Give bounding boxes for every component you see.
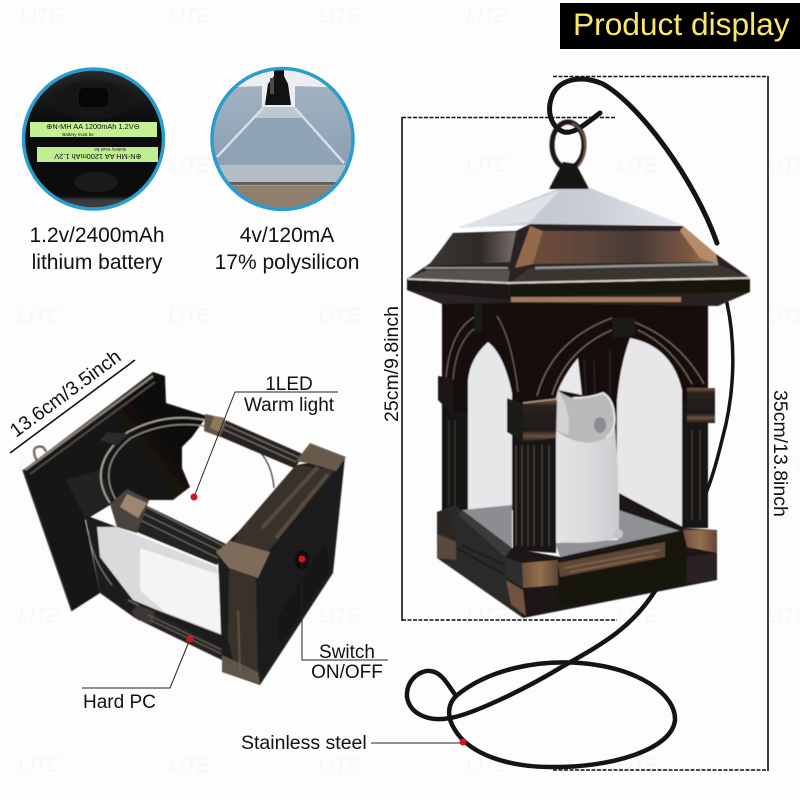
callout: stainless steel [241, 732, 466, 754]
base silhouette [437, 508, 717, 618]
callout: switch: Switch [319, 642, 375, 663]
heading badge: Product display: Product display [573, 6, 790, 42]
panel: battery detail [20, 66, 170, 274]
caption: solar specs: 4v/120mA [240, 224, 334, 247]
wire stand behind lantern [468, 79, 733, 502]
callout: switch: ON/OFF [311, 662, 383, 683]
lower window [85, 515, 222, 660]
base [437, 505, 717, 618]
candle [554, 390, 623, 543]
dimension: lantern height [381, 117, 617, 621]
wire stand base [407, 591, 675, 767]
dimension: width: 13.6cm/3.5inch [6, 346, 125, 442]
icon: battery compartment circle: Battery must be [62, 132, 94, 137]
caption: solar type: 17% polysilicon [215, 251, 359, 274]
right column [682, 388, 715, 528]
roof plate and dark interior [23, 372, 207, 611]
icon: battery compartment circle: ⊕N-MH AA 1200mAh 1.2V [54, 152, 142, 161]
panel: solar panel detail [210, 68, 359, 274]
callout: hard PC [82, 636, 194, 713]
base face [216, 443, 346, 685]
icon: battery compartment circle: ⊕N-MH AA 1200mAh 1.2V⊖ [46, 122, 140, 131]
small lantern from below [23, 372, 346, 685]
hanging ring [552, 122, 585, 168]
callout: stainless steel: Stainless steel [241, 732, 367, 754]
lantern body [442, 302, 708, 530]
roof [407, 188, 750, 306]
left column [438, 376, 468, 512]
caption: battery: 1.2v/2400mAh [30, 224, 164, 247]
callout: 1LED warm light: 1LED [265, 374, 313, 395]
callout: 1LED warm light [190, 374, 338, 500]
callout: 1LED warm light: Warm light [244, 395, 335, 416]
icon: battery compartment circle: Battery must be [94, 147, 126, 152]
floor [462, 493, 683, 557]
icon: battery compartment circle [20, 66, 170, 212]
icon: solar panel circle [210, 68, 355, 215]
rails [110, 414, 305, 660]
caption: battery type: lithium battery [32, 251, 163, 274]
wire through upper window [260, 452, 274, 488]
roof finial [549, 162, 589, 189]
main lantern [407, 122, 750, 618]
callout: switch [298, 556, 388, 683]
dimension: lantern height: 25cm/9.8inch [381, 306, 403, 422]
dimension: overall height [553, 76, 791, 771]
dimension: overall height: 35cm/13.8inch [769, 390, 791, 517]
callout: hard PC: Hard PC [83, 692, 156, 713]
front column [507, 398, 557, 553]
